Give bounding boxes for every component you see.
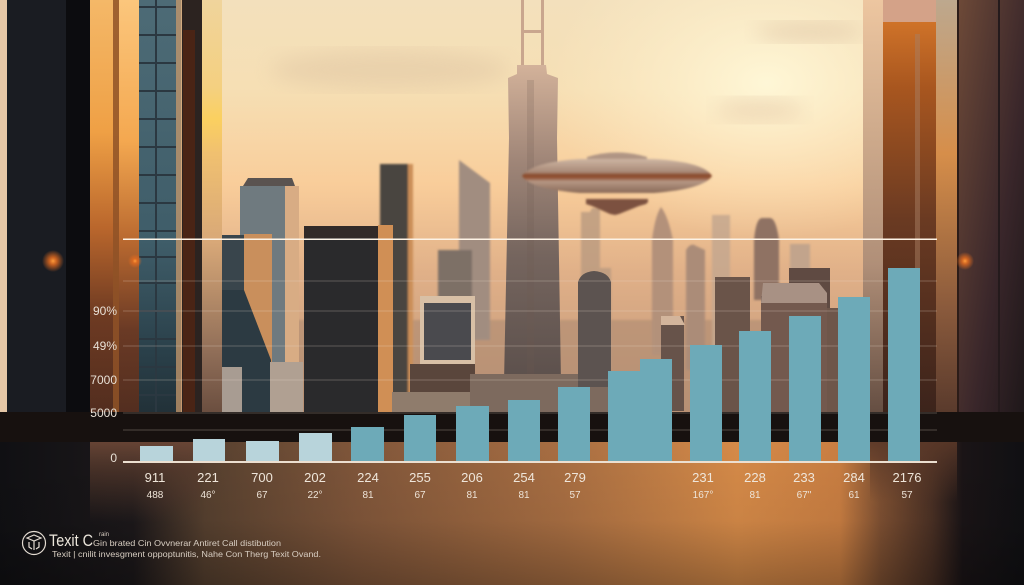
right lamp: [956, 252, 974, 270]
x axis labels: primary: 228: [744, 470, 766, 485]
x axis labels: secondary: 167°: [693, 490, 713, 501]
small brand note: rain: [99, 532, 109, 538]
x axis labels: primary: 254: [513, 470, 535, 485]
x axis labels: secondary: 57: [569, 490, 581, 501]
y axis labels: 0: [110, 451, 117, 465]
x axis labels: secondary: 67": [797, 490, 812, 501]
x axis labels: primary: 224: [357, 470, 379, 485]
bars: teal: [351, 268, 920, 461]
x axis labels: primary: 279: [564, 470, 586, 485]
x axis labels: secondary: 81: [518, 490, 530, 501]
top rule: [123, 238, 937, 240]
x axis labels: secondary: 488: [147, 490, 164, 501]
x axis labels: primary: 255: [409, 470, 431, 485]
x axis labels: primary: 911: [145, 470, 165, 485]
right window frame: [863, 0, 1024, 440]
x axis labels: primary: 284: [843, 470, 865, 485]
x axis labels: secondary: 22°: [307, 490, 323, 501]
y axis labels: 7000: [90, 373, 117, 387]
x axis labels: primary: 206: [461, 470, 483, 485]
x axis labels: primary: 231: [692, 470, 714, 485]
floor: [0, 442, 1024, 585]
dark horizontal beam: [0, 412, 1024, 442]
x axis labels: secondary: 67: [414, 490, 426, 501]
logo icon: [22, 532, 46, 554]
x axis labels: secondary: 81: [362, 490, 374, 501]
x axis labels: primary: 233: [793, 470, 815, 485]
y axis labels: 90%: [93, 304, 117, 318]
sky background: [0, 0, 1024, 440]
distant skyline: [222, 160, 872, 412]
baseline: [123, 461, 937, 463]
x axis labels: secondary: 46°: [200, 490, 216, 501]
central tower: [504, 0, 561, 382]
caption line 1: Gin brated Cin Ovvnerar Antiret Call distibution: [93, 538, 281, 548]
left window frame: [0, 0, 222, 440]
y axis labels: 49%: [93, 339, 117, 353]
x axis labels: secondary: 81: [466, 490, 478, 501]
chart: bars with axis: [123, 238, 937, 463]
x axis labels: secondary: [147, 490, 913, 501]
left lamps: [42, 250, 142, 272]
y axis labels: 5000: [90, 406, 117, 420]
x axis labels: secondary: 81: [749, 490, 761, 501]
x axis labels: secondary: 57: [901, 490, 913, 501]
x axis labels: secondary: 61: [848, 490, 860, 501]
x axis labels: primary: 2176: [893, 470, 921, 485]
bars: light: [140, 433, 332, 461]
mid-ground buildings: [222, 178, 839, 413]
grid lines: [123, 281, 937, 430]
brand title: Texit C: [49, 531, 93, 550]
x axis labels: primary: [145, 470, 921, 485]
saucer: [522, 152, 712, 215]
x axis labels: secondary: 67: [256, 490, 268, 501]
x axis labels: primary: 700: [251, 470, 273, 485]
x axis labels: primary: 221: [197, 470, 219, 485]
caption line 2: Texit | cnilit invesgment oppoptunitis, Nahe Con Therg Texit Ovand.: [52, 549, 321, 559]
y axis labels: [90, 304, 117, 465]
x axis labels: primary: 202: [304, 470, 326, 485]
